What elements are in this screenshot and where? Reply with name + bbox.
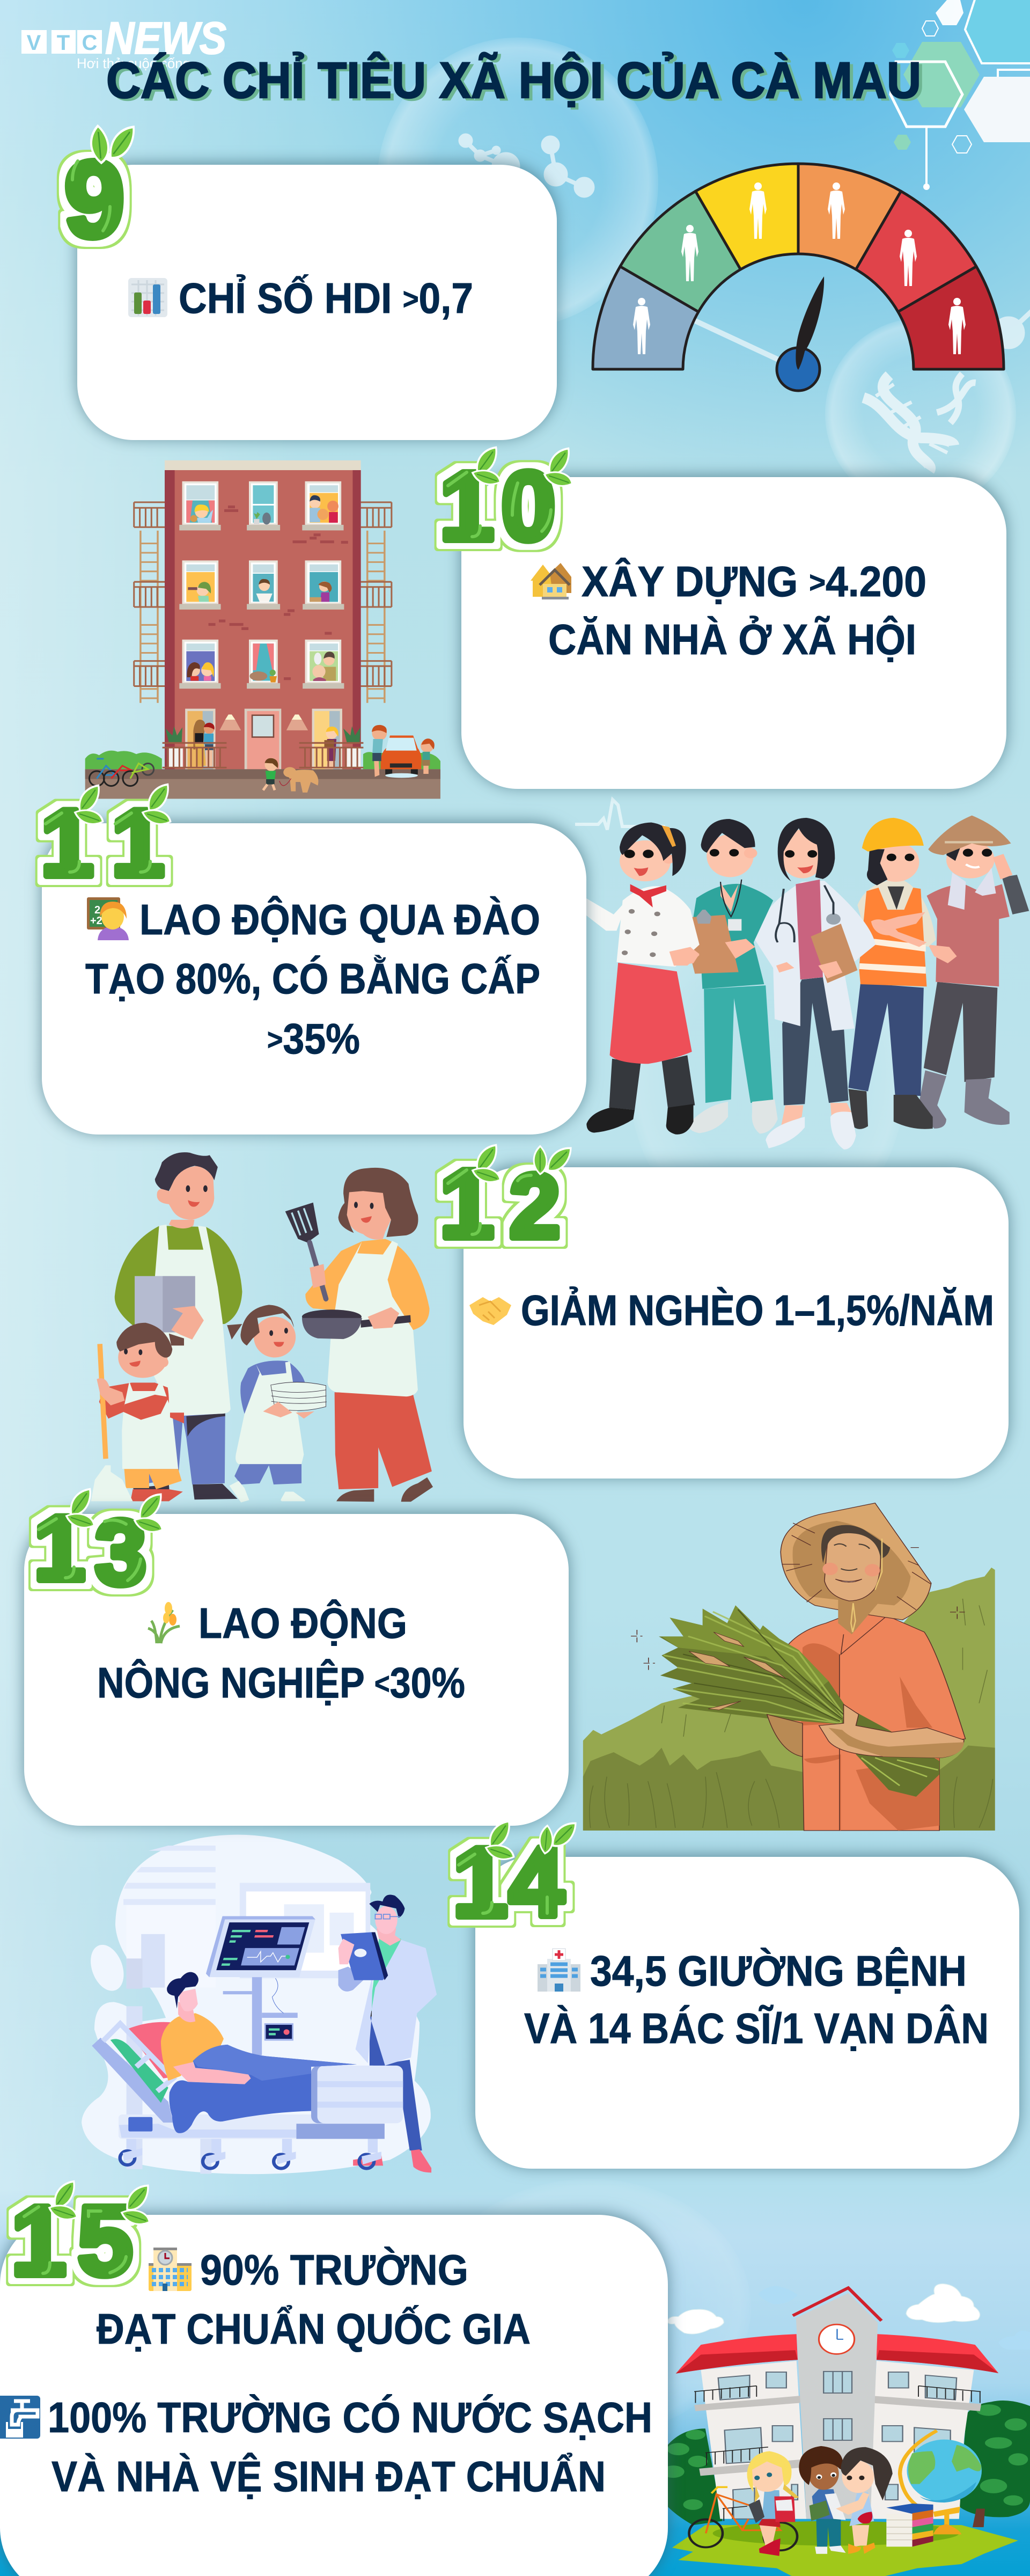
- background blob: [82, 1835, 431, 2174]
- badge: number 15: [11, 2181, 149, 2296]
- panel: card 13 agricultural labour: [24, 1489, 569, 1826]
- decoration: molecule: [459, 134, 1030, 361]
- badge: number 10: 0: [501, 451, 556, 561]
- clouds: [667, 2284, 980, 2334]
- badge: number 12: 2: [510, 1155, 560, 1257]
- windows row 2: [179, 560, 344, 610]
- island: [672, 2525, 1018, 2576]
- icon: hospital: [538, 1949, 580, 1992]
- sparkles: [631, 1606, 965, 1670]
- icon: teacher: 2: [94, 904, 100, 916]
- icon: houses: [531, 563, 571, 599]
- text: schools national standard: 90% TRƯỜNG: [200, 2246, 468, 2294]
- decoration: ECG line: [575, 800, 665, 830]
- badge: number 10: [439, 447, 571, 561]
- icon: handshake: [469, 1297, 511, 1325]
- text: clean water and toilets: [48, 2394, 652, 2500]
- illustration: rice farmer: [583, 1503, 995, 1831]
- fire escapes: [134, 502, 392, 703]
- stack of books: [886, 2504, 933, 2546]
- text: trained labour: TẠO 80%, CÓ BẰNG CẤP: [85, 955, 540, 1002]
- shirt: [767, 1603, 966, 1831]
- panel: card 12 poverty reduction: [439, 1145, 1009, 1479]
- arms: [767, 1714, 803, 1757]
- badge: number 11: [41, 784, 170, 896]
- badge: number 13: [34, 1489, 161, 1604]
- illustration: apartment building: [85, 460, 440, 799]
- street: [85, 769, 440, 799]
- railings: [163, 743, 363, 767]
- text: clean water and toilets: VÀ NHÀ VỆ SINH ĐẠT CHUẨN: [52, 2453, 606, 2500]
- badge: number 12: 1: [439, 1148, 494, 1258]
- icon: body silhouettes: [633, 182, 966, 354]
- decoration: DNA helix: [863, 374, 976, 471]
- globe: [900, 2431, 982, 2534]
- text: beds and doctors: [524, 1947, 989, 2052]
- windows row 3: [179, 640, 344, 689]
- bushes: [85, 751, 440, 769]
- bricks: [209, 506, 348, 680]
- illustration: school with children: [655, 2284, 1030, 2576]
- text: agriculture: 30%: [390, 1659, 465, 1707]
- gauge hub: [777, 348, 820, 391]
- blond girl: [747, 2451, 799, 2556]
- terrace plants and people: [165, 720, 361, 775]
- facade: [165, 470, 361, 772]
- doors and lamps: [185, 709, 342, 770]
- panel: card 15 schools: [0, 2181, 668, 2576]
- car and washing people: [372, 725, 435, 778]
- patient: [161, 1972, 357, 2133]
- badge: number 12: [439, 1145, 570, 1258]
- panel: card 9 HDI: [64, 126, 557, 440]
- school wings: [676, 2334, 998, 2521]
- text: agriculture: LAO ĐỘNG: [198, 1599, 407, 1647]
- text: HDI: CHỈ SỐ HDI: [179, 274, 413, 322]
- panel: card 14 hospital beds: [453, 1820, 1019, 2169]
- gauge needle: [796, 276, 824, 370]
- badge: number 15: 1: [11, 2186, 66, 2296]
- text: trained labour: LAO ĐỘNG QUA ĐÀO: [139, 896, 540, 943]
- father: [115, 1152, 242, 1499]
- logo: VTC News: [21, 13, 226, 71]
- monitor: [206, 1916, 315, 2055]
- doctor: [754, 818, 876, 1150]
- text: schools national standard: ĐẠT CHUẨN QUỐC GIA: [97, 2305, 531, 2353]
- older child with broom: [91, 1323, 184, 1501]
- badge: number 10: 1: [439, 451, 494, 561]
- boy: [799, 2446, 846, 2554]
- text: trained labour: [85, 896, 540, 1063]
- text: housing: >: [809, 565, 826, 599]
- face: [838, 1599, 879, 1634]
- badge: number 14: 4: [509, 1827, 564, 1937]
- text: housing: 4.200: [826, 558, 926, 605]
- hat back: [781, 1503, 931, 1620]
- younger child: [227, 1305, 327, 1503]
- decoration: hexagons top right: [891, 0, 1030, 190]
- logo: VTC News: V: [27, 31, 41, 55]
- badge: number 14: [453, 1820, 575, 1938]
- text: trained labour: >: [267, 1022, 283, 1056]
- text: housing: CĂN NHÀ Ở XÃ HỘI: [548, 616, 916, 663]
- dark-haired girl: [836, 2447, 893, 2554]
- bed: [92, 2022, 403, 2169]
- text: HDI: 0,7: [419, 274, 473, 322]
- grass field: [583, 1568, 995, 1831]
- badge: number 13: 3: [95, 1501, 146, 1604]
- bicycle: [689, 2487, 797, 2550]
- text: beds and doctors: VÀ 14 BÁC SĨ/1 VẠN DÂN: [524, 2004, 989, 2052]
- panel: card 11 trained labour: [41, 784, 586, 1135]
- text: schools national standard: [97, 2246, 531, 2353]
- panel: card 10 social housing: [439, 447, 1006, 789]
- badge: number 9: 9: [64, 138, 124, 260]
- logo: VTC News: Hơi thở cuộc sống: [77, 55, 190, 71]
- badge: number 13: 1: [34, 1497, 85, 1600]
- icon: water tap: [0, 2396, 40, 2439]
- clock tower: [793, 2288, 881, 2519]
- badge: number 15: 5: [78, 2186, 133, 2296]
- logo: VTC News: NEWS: [105, 13, 226, 63]
- badge: number 11: 1: [41, 789, 93, 896]
- construction worker: [849, 818, 936, 1129]
- illustration: workers group: [556, 816, 1029, 1150]
- logo: VTC News: C: [82, 31, 97, 55]
- room details: [123, 1846, 370, 2174]
- title: CÁC CHỈ TIÊU XÃ HỘI CỦA CÀ MAU: [106, 52, 921, 109]
- illustration: family doing chores: [91, 1152, 433, 1503]
- text: housing: XÂY DỰNG: [582, 558, 812, 605]
- text: housing: [548, 558, 926, 663]
- trees: [655, 2401, 1030, 2527]
- boy with dog: [263, 758, 318, 793]
- badge: number 11: 1: [112, 789, 164, 896]
- farmer worker: [918, 816, 1029, 1129]
- text: trained labour: 35%: [283, 1015, 360, 1063]
- icon: bar chart: [128, 278, 167, 317]
- doctor: [339, 1895, 437, 2172]
- rice bundle: [659, 1605, 845, 1724]
- icon: school: [149, 2248, 192, 2291]
- text: beds and doctors: 34,5 GIƯỜNG BỆNH: [590, 1947, 967, 1995]
- text: agriculture: <: [374, 1666, 390, 1700]
- icon: rice plant: [148, 1602, 180, 1643]
- windows row 1: [179, 481, 344, 530]
- icon: teacher: +2: [90, 915, 102, 927]
- icon: teacher: [87, 897, 129, 940]
- bicycles: [89, 759, 154, 786]
- chef: [556, 823, 700, 1135]
- nurse: [671, 819, 778, 1133]
- logo: VTC News: T: [57, 31, 70, 55]
- mother: [285, 1168, 433, 1502]
- badge: number 14: 1: [453, 1827, 507, 1938]
- gauge illustration: [593, 164, 1004, 391]
- text: clean water and toilets: 100% TRƯỜNG CÓ NƯỚC SẠCH: [48, 2394, 652, 2441]
- text: HDI: >: [403, 282, 419, 316]
- text: agriculture: NÔNG NGHIỆP: [97, 1659, 401, 1707]
- text: agriculture: [97, 1599, 465, 1707]
- illustration: hospital patient and doctor: [82, 1835, 437, 2174]
